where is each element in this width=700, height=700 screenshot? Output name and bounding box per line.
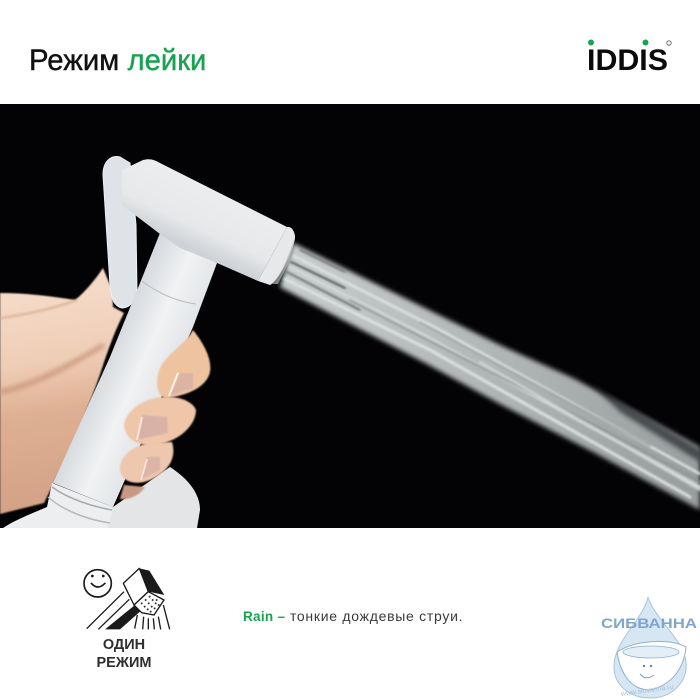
title: Режим лейки — [29, 44, 206, 77]
description text: Rain – тонкие дождевые струи. — [243, 608, 463, 624]
shower head — [122, 159, 295, 285]
icon label: РЕЖИМ — [97, 655, 151, 671]
watermark url: www.sibvanna.ru — [620, 684, 674, 698]
icon: shower head — [87, 568, 170, 629]
photo background — [0, 104, 700, 528]
icon label: ОДИН — [103, 637, 145, 653]
icon: smiley — [84, 570, 111, 597]
water spray — [280, 243, 700, 510]
watermark tub — [617, 641, 686, 690]
watermark name: СИБВАННА — [601, 615, 697, 631]
watermark: sibvanna — [601, 596, 697, 698]
photo: bidet shower spraying water — [0, 104, 700, 528]
icon label — [97, 637, 151, 671]
shower base — [3, 467, 200, 528]
icon: one mode shower — [83, 568, 170, 630]
watermark drop — [614, 597, 686, 698]
shower handle — [53, 233, 217, 507]
shower paddle lever — [103, 157, 137, 308]
hand: palm and index finger — [0, 268, 124, 514]
fingers gripping handle — [120, 330, 210, 499]
